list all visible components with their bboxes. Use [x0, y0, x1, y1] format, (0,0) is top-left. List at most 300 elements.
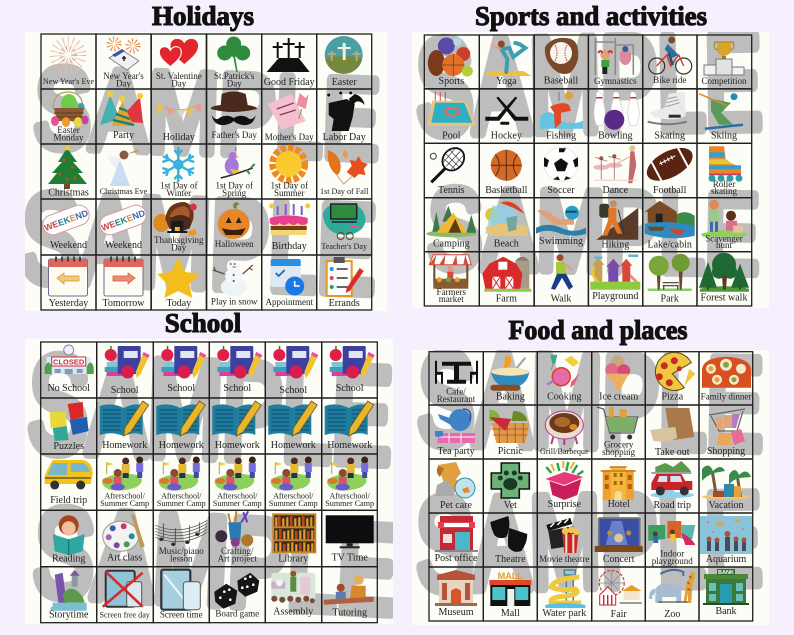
cell: Homework — [153, 398, 209, 454]
cell: Labor Day — [317, 89, 372, 144]
cell: Afterschool/Summer Camp — [153, 454, 209, 510]
watermark: SAMPLE — [25, 63, 380, 298]
icon: teapot — [435, 409, 475, 443]
icon: swimmer — [536, 206, 586, 236]
label: Today — [166, 298, 191, 309]
label: Baking — [496, 392, 525, 403]
icon: glove and ball — [545, 38, 578, 74]
paper background — [412, 350, 769, 625]
label: Board game — [215, 609, 259, 619]
label: Yesterday — [49, 298, 88, 309]
cell: Halloween — [207, 199, 262, 255]
icon: tablet and phone — [161, 570, 200, 610]
cell: Basketball — [479, 143, 534, 198]
cell: Skiing — [697, 89, 752, 143]
cell: Music/piano lesson — [153, 510, 209, 567]
cell: Easter — [317, 34, 372, 89]
label: Lake/cabin — [647, 240, 692, 251]
cell: Baking — [483, 352, 537, 405]
cell: Concert — [592, 513, 645, 567]
icon: trees and bench — [648, 254, 692, 290]
icon: table and chairs — [435, 361, 478, 384]
label: Errands — [329, 298, 360, 309]
label: Christmas — [48, 188, 89, 198]
label: Assembly — [273, 607, 313, 618]
icon: school books — [273, 346, 318, 378]
icon: post office building — [435, 516, 478, 552]
cell: Christmas — [41, 144, 96, 199]
icon: birthday cake — [269, 202, 310, 235]
label: Homework — [327, 440, 372, 451]
label: Swimming — [539, 236, 583, 247]
label: Take out — [655, 447, 690, 458]
cell: Movie theatre — [537, 513, 592, 567]
label: Teacher's Day — [321, 242, 368, 251]
label: Homework — [271, 440, 316, 451]
icon: angel — [108, 149, 138, 186]
icon: tent and trees — [426, 206, 476, 237]
watermark: SAMPLE: SAMPLE — [26, 330, 394, 492]
cell: Dance — [588, 143, 643, 198]
cell: Theatre — [483, 513, 537, 567]
label: Fishing — [546, 131, 576, 142]
cell: New Year's Day — [96, 34, 151, 89]
cell: Sports — [424, 35, 479, 89]
icon: racket — [430, 144, 469, 182]
icon: weekend stamp: WEEKEND — [43, 208, 90, 233]
icon: ballerinas — [593, 145, 636, 183]
label: Picnic — [498, 446, 523, 457]
icon: school books — [330, 346, 375, 378]
label: Family dinner — [701, 392, 751, 402]
label: Camping — [433, 239, 470, 250]
cell: Forest walk — [697, 252, 752, 306]
icon: autumn leaves — [328, 150, 368, 184]
label: Tutoring — [332, 608, 367, 619]
cell: Competition — [697, 35, 752, 89]
label: Hiking — [601, 240, 629, 251]
label: Reading — [52, 553, 85, 564]
cell: Homework — [97, 398, 153, 454]
label: 1st Day of Fall — [320, 187, 369, 196]
label: Ice cream — [599, 392, 638, 403]
cell: Good Friday — [262, 34, 317, 89]
cell: Yoga — [479, 35, 534, 89]
cell: Vacation — [699, 459, 753, 513]
label: Field trip — [50, 495, 87, 506]
icon: hiker on slope — [596, 200, 638, 240]
cell: Picnic — [483, 405, 537, 459]
icon: hearts — [159, 39, 198, 67]
paper background — [25, 32, 387, 311]
label: Father's Day — [212, 130, 257, 140]
icon: picnic basket — [489, 410, 529, 443]
cell: Water park — [537, 567, 592, 621]
label: School — [336, 383, 364, 394]
icon: kids at camp — [159, 456, 200, 491]
label: Tea party — [437, 446, 475, 457]
label: Road trip — [654, 500, 691, 511]
icon: sun — [274, 149, 304, 179]
icon: jack-o-lantern — [218, 202, 250, 239]
icon: playground castle — [590, 256, 640, 290]
icon: trophy podium — [704, 42, 744, 75]
cell: Appointment — [262, 255, 317, 310]
icon: red barn — [482, 257, 531, 292]
cell: Crafting/Art project — [209, 510, 265, 567]
cell: Father's Day — [207, 89, 262, 144]
icon: bunting — [155, 102, 201, 118]
cell: Library — [265, 510, 322, 567]
label: Bank — [715, 606, 737, 617]
cell: Afterschool/Summer Camp: Summer Camp — [213, 499, 262, 508]
cell: Bowling — [588, 89, 643, 143]
cell: Mother's Day — [262, 89, 317, 144]
label: Movie theatre — [539, 554, 589, 564]
label: Easter — [332, 77, 357, 88]
cell: Fair — [592, 567, 645, 621]
icon: snowflake — [162, 147, 194, 182]
cell: Zoo — [645, 567, 699, 621]
heading: Sports and activities: Sports and activities — [475, 1, 707, 31]
cell: Scavenger hunt: hunt — [716, 240, 732, 250]
cell: 1st Day of Winter: Winter — [166, 188, 191, 198]
icon: weekend stamp: WEEKEND — [100, 208, 147, 233]
icon: ice cream cone — [605, 355, 630, 393]
cell: 1st Day of Summer — [262, 144, 317, 199]
cell: Hotel — [592, 459, 645, 513]
label: Appointment — [265, 297, 313, 307]
cell: Play in snow — [207, 255, 262, 310]
cell: Puzzles — [41, 398, 97, 454]
icon: takeout bag and box — [650, 408, 694, 442]
watermark: SAMPLE: SAMPLE — [427, 165, 760, 297]
label: Zoo — [664, 609, 680, 620]
cell: Scavenger hunt — [697, 198, 752, 252]
cell: Assembly — [265, 567, 322, 623]
label: New Year's — [103, 71, 144, 81]
label: Farm — [496, 294, 517, 305]
cell: Teacher's Day — [317, 199, 372, 255]
label: Homework — [159, 440, 204, 451]
cell: Tomorrow — [96, 255, 151, 310]
heading: Holidays: Holidays — [152, 1, 254, 31]
cell: Baseball — [534, 35, 588, 89]
icon: yoga pose — [484, 40, 531, 76]
label: Storytime — [49, 610, 89, 621]
cell: Walk — [534, 252, 588, 306]
icon: open book and pencil — [268, 401, 317, 436]
cell: Thanksgiving Day — [151, 199, 206, 255]
icon: skier — [699, 93, 743, 129]
cell: Music/piano lesson: lesson — [170, 553, 193, 563]
label: Soccer — [547, 185, 575, 196]
icon: basketball — [491, 150, 522, 181]
label: Roller — [713, 179, 735, 189]
icon: three crosses — [267, 38, 310, 72]
cell: Thanksgiving Day: Day — [171, 242, 187, 252]
cell: Museum — [429, 567, 483, 621]
label: No School — [47, 383, 90, 394]
icon: plate and utensils — [547, 355, 579, 388]
cell: Screen time — [153, 567, 209, 623]
cell: St. Valentine Day — [151, 34, 206, 89]
label: Football — [653, 185, 687, 196]
icon: easter circle — [325, 36, 363, 74]
cell: Grocery shopping: shopping — [602, 447, 636, 457]
label: Mall — [501, 608, 520, 619]
cell: Field trip — [41, 454, 97, 510]
icon: water slides — [545, 570, 585, 608]
label: Play in snow — [211, 296, 258, 306]
label: Grill/Barbeque — [540, 447, 589, 456]
watermark: SAMPLE: SAMPLE — [31, 482, 401, 635]
icon: ice skate — [648, 92, 687, 124]
cell: Screen free day — [97, 567, 153, 623]
panel: sports and activities — [412, 1, 769, 308]
cell: School — [97, 342, 153, 398]
icon: bookshelf — [272, 513, 316, 553]
cell: Grill/Barbeque — [537, 405, 592, 459]
cell: Shopping — [699, 405, 753, 459]
cell: Park — [643, 252, 697, 306]
cell: Afterschool/Summer Camp — [265, 454, 322, 510]
icon: gymnastics frame — [595, 38, 633, 75]
icon: shamrock — [217, 36, 250, 72]
icon: school books — [105, 346, 150, 378]
label: Bike ride — [653, 75, 686, 85]
cell: Camping — [424, 198, 479, 252]
icon: roller skate — [708, 146, 742, 182]
icon: mixing bowl — [490, 355, 529, 391]
cell: Skating — [643, 89, 697, 143]
cell: Weekend — [96, 199, 151, 255]
label: Good Friday — [264, 77, 315, 88]
icon: shopping cart and bags — [709, 409, 745, 445]
label: Tomorrow — [102, 298, 145, 309]
icon: museum building — [435, 570, 477, 606]
cell: St. Valentine Day: Day — [171, 78, 187, 88]
icon: palette and brush — [103, 513, 145, 551]
label: Library — [278, 553, 308, 564]
cell: Holiday — [151, 89, 206, 144]
icon: crossed out devices — [103, 571, 143, 607]
icon: puzzle pieces — [50, 402, 89, 441]
cell: 1st Day of Fall — [317, 144, 372, 199]
paper background — [412, 32, 769, 308]
label: Scavenger — [705, 234, 743, 244]
label: Post office — [435, 553, 478, 564]
icon: christmas tree — [48, 146, 87, 189]
cell: Cafe/Restaurant: Restaurant — [437, 394, 476, 404]
watermark: SAMPLE — [28, 350, 393, 619]
cell: Road trip — [645, 459, 699, 513]
label: School — [167, 383, 195, 394]
cell: St. Patrick's Day — [207, 34, 262, 89]
cell: Afterschool/Summer Camp — [97, 454, 153, 510]
label: School — [223, 383, 251, 394]
icon: open book and pencil — [212, 401, 261, 436]
cell: Yesterday — [41, 255, 96, 310]
label: Surprise — [548, 499, 582, 510]
label: Water park — [542, 608, 586, 619]
icon: tutor at desk — [324, 575, 374, 605]
label: Weekend — [105, 240, 142, 251]
icon: school books — [161, 346, 206, 378]
icon: dog, cat and fish bowl — [435, 462, 475, 498]
label: Homework — [102, 440, 147, 451]
icon: school bus — [45, 460, 93, 490]
icon: market stall — [429, 255, 471, 289]
cell: Farmers market — [424, 252, 479, 306]
cell: Gymnastics — [588, 35, 643, 89]
icon: gift box and confetti — [545, 461, 583, 500]
watermark: SAMPLE — [416, 350, 763, 596]
label: Vet — [504, 500, 517, 511]
icon: kids at camp — [215, 456, 256, 491]
cell: Weekend — [40, 199, 96, 255]
cell: Reading — [41, 510, 97, 567]
icon: kids at camp — [327, 456, 368, 491]
icon: ferris wheel and tents — [599, 570, 642, 605]
cell: Birthday — [262, 199, 317, 255]
label: Cafe/ — [446, 387, 466, 397]
icon: fireworks — [56, 43, 80, 67]
label: TV Time — [332, 552, 368, 563]
paper background — [25, 339, 393, 624]
icon: green bank building: BANK — [718, 570, 734, 576]
cell: Cafe/Restaurant — [429, 352, 483, 405]
icon: dinner table — [702, 357, 751, 388]
label: Mother's Day — [265, 132, 314, 142]
label: Tennis — [438, 185, 465, 196]
icon: hotel building — [601, 467, 636, 500]
label: Dance — [603, 185, 629, 196]
cell: New Year's Day: Day — [116, 78, 131, 88]
label: Weekend — [50, 240, 87, 251]
cell: Surprise — [537, 459, 592, 513]
panel: food and places — [412, 315, 769, 625]
cell: Roller skating: skating — [711, 186, 737, 196]
label: Gymnastics — [594, 76, 637, 86]
label: Playground — [592, 291, 638, 302]
cell: Cooking — [537, 352, 592, 405]
cell: Storytime — [41, 567, 97, 623]
cell: Afterschool/Summer Camp: Summer Camp — [269, 499, 318, 508]
icon: open book and pencil — [156, 401, 205, 436]
cell: Roller skating — [697, 143, 752, 198]
cell: Indoor playground — [645, 513, 699, 567]
label: Hockey — [491, 131, 522, 142]
cell: Pizza — [645, 352, 699, 405]
watermark: SAMPLE: SAMPLE — [415, 467, 763, 617]
icon: egg basket — [51, 92, 88, 127]
icon: crossed sticks — [485, 97, 528, 125]
icon: calendar and clock — [271, 259, 304, 296]
label: Fair — [611, 609, 627, 620]
icon: kids at camp — [271, 456, 312, 491]
icon: walking woman — [551, 254, 573, 290]
cell: Party — [96, 89, 151, 144]
icon: craft cup — [215, 511, 253, 547]
cell: 1st Day of Summer: Summer — [274, 188, 304, 198]
cell: Hockey — [479, 89, 534, 143]
icon: cyclist — [649, 36, 692, 74]
cell: School — [322, 342, 377, 398]
icon: clipboard — [327, 257, 364, 296]
label: Art class — [107, 552, 142, 563]
cell: School — [265, 342, 322, 398]
cell: Farmers market: market — [439, 294, 464, 304]
icon: fish and wave — [540, 92, 583, 129]
cell: Afterschool/Summer Camp: Summer Camp — [157, 499, 206, 508]
icon: pink card and tulip — [268, 93, 309, 130]
cell: Afterschool/Summer Camp: Summer Camp — [325, 499, 374, 508]
icon: palms and luggage — [702, 465, 751, 500]
label: St. Valentine — [156, 71, 202, 81]
icon: aquarium tank — [700, 516, 752, 554]
cell: Afterschool/Summer Camp — [322, 454, 377, 510]
cell: Beach — [479, 198, 534, 252]
cell: Take out — [645, 405, 699, 459]
icon: open book and pencil — [100, 401, 149, 436]
cell: Pool — [424, 89, 479, 143]
label: Pizza — [661, 392, 684, 403]
label: Skating — [654, 131, 685, 142]
cell: Playground — [588, 252, 643, 306]
watermark: SAMPLE: SAMPLE — [19, 168, 378, 319]
label: St.Patrick's — [214, 71, 255, 81]
icon: chalkboard and glasses — [323, 204, 366, 240]
label: New Year's Eve — [43, 77, 94, 86]
label: Theatre — [495, 554, 526, 565]
cell: 1st Day of Spring — [207, 144, 262, 199]
label: Afterschool/ — [329, 492, 371, 500]
label: Christmas Eve — [100, 187, 148, 196]
label: Competition — [702, 76, 747, 86]
label: Grocery — [604, 440, 634, 450]
label: Holiday — [163, 132, 195, 143]
icon: calendar with left arrow — [48, 256, 88, 296]
cell: Family dinner — [699, 352, 753, 405]
label: Basketball — [485, 185, 528, 196]
cell: Indoor playground: playground — [652, 556, 693, 566]
cell: Tennis — [424, 143, 479, 198]
icon: closed school: CLOSED — [53, 358, 85, 366]
cell: Pet care — [429, 459, 483, 513]
icon: green cross with paw — [491, 463, 529, 498]
cell: Today — [151, 255, 206, 310]
icon: swimming pool — [427, 92, 476, 126]
cell: Afterschool/Summer Camp — [209, 454, 265, 510]
icon: indoor play area — [648, 521, 695, 545]
watermark: SAMPLE — [416, 32, 763, 278]
label: Homework — [215, 440, 260, 451]
label: Crafting/ — [221, 546, 254, 556]
icon: balls — [428, 38, 473, 76]
label: Pet care — [440, 500, 473, 511]
watermark: SAMPLE: SAMPLE — [415, 7, 763, 162]
label: Afterschool/ — [104, 492, 146, 500]
cell: Christmas Eve — [96, 144, 151, 199]
cell: Easter Monday: Monday — [54, 132, 84, 142]
icon: concert stage — [595, 518, 643, 552]
label: Music/piano — [159, 546, 204, 556]
label: School — [279, 385, 307, 396]
cell: Crafting/Art project: Art project — [218, 553, 257, 563]
icon: calendar with right arrow — [104, 256, 143, 296]
label: Beach — [494, 239, 519, 250]
